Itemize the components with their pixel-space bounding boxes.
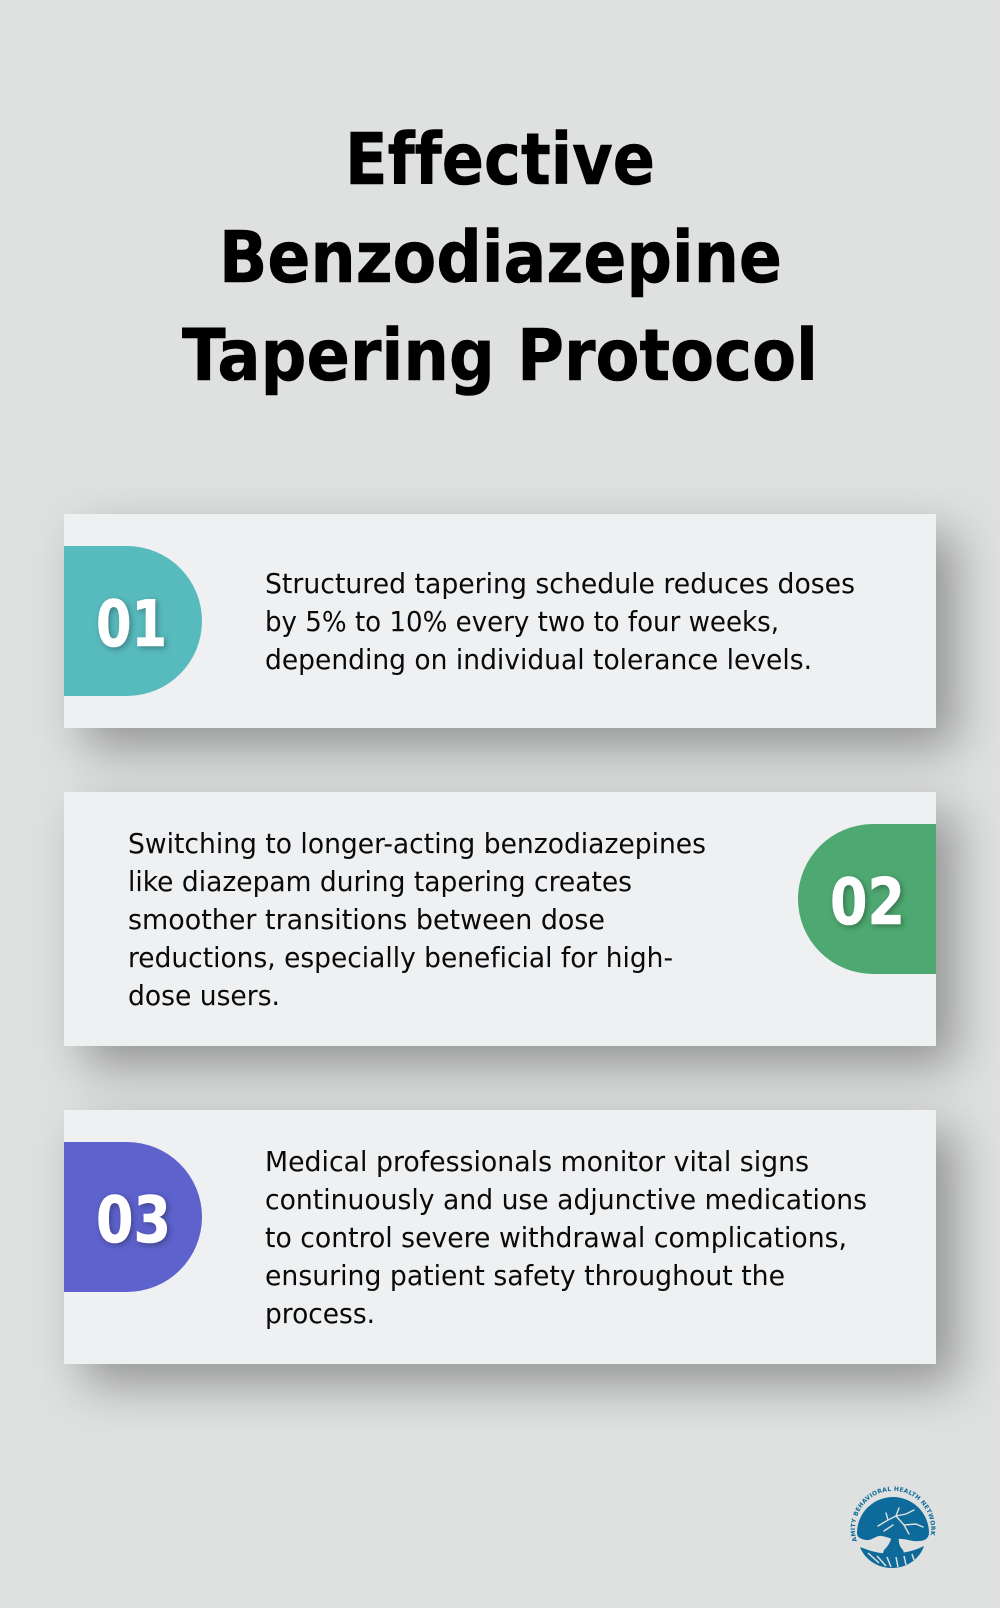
badge: 03: 03 <box>96 1184 171 1258</box>
text: step 03 description: to control severe withdrawal complications, <box>265 1221 847 1254</box>
title <box>182 118 818 397</box>
text: step 02 description: dose users. <box>128 979 280 1012</box>
icon: Amity Behavioral Health Network logo: AMITY BEHAVIORAL HEALTH NETWORK <box>850 1486 936 1542</box>
badge: 03 <box>64 1142 202 1292</box>
text: step 03 description: continuously and use adjunctive medications <box>265 1183 867 1216</box>
title: Tapering Protocol <box>182 314 818 397</box>
tree roots <box>860 1546 924 1568</box>
icon: Amity Behavioral Health Network logo <box>850 1486 936 1568</box>
tree trunk <box>882 1530 905 1556</box>
text: step 03 description <box>265 1145 867 1330</box>
text: step 02 description: like diazepam during tapering creates <box>128 865 632 898</box>
badge: 02 <box>798 824 936 974</box>
tree canopy <box>857 1497 929 1541</box>
text: step 01 description: depending on individual tolerance levels. <box>265 643 812 676</box>
text: step 03 description: ensuring patient safety throughout the <box>265 1259 785 1292</box>
text: step 03 description: process. <box>265 1297 375 1330</box>
text: step 02 description: Switching to longer-acting benzodiazepines <box>128 827 706 860</box>
badge: 02: 02 <box>830 866 905 940</box>
panel: step 02 <box>64 792 936 1046</box>
text: step 01 description <box>265 567 855 676</box>
tree branches <box>878 1508 923 1534</box>
text: step 02 description: reductions, especially beneficial for high- <box>128 941 673 974</box>
badge: 01: 01 <box>96 588 167 662</box>
panel: step 03 <box>64 1110 936 1364</box>
title: Effective <box>345 118 655 201</box>
badge: 01 <box>64 546 202 696</box>
text: step 01 description: by 5% to 10% every two to four weeks, <box>265 605 779 638</box>
title: Benzodiazepine <box>219 216 782 299</box>
panel: step 01 <box>64 514 936 728</box>
text: step 03 description: Medical professionals monitor vital signs <box>265 1145 809 1178</box>
text: step 01 description: Structured tapering schedule reduces doses <box>265 567 855 600</box>
text: step 02 description: smoother transitions between dose <box>128 903 605 936</box>
text: step 02 description <box>128 827 706 1012</box>
